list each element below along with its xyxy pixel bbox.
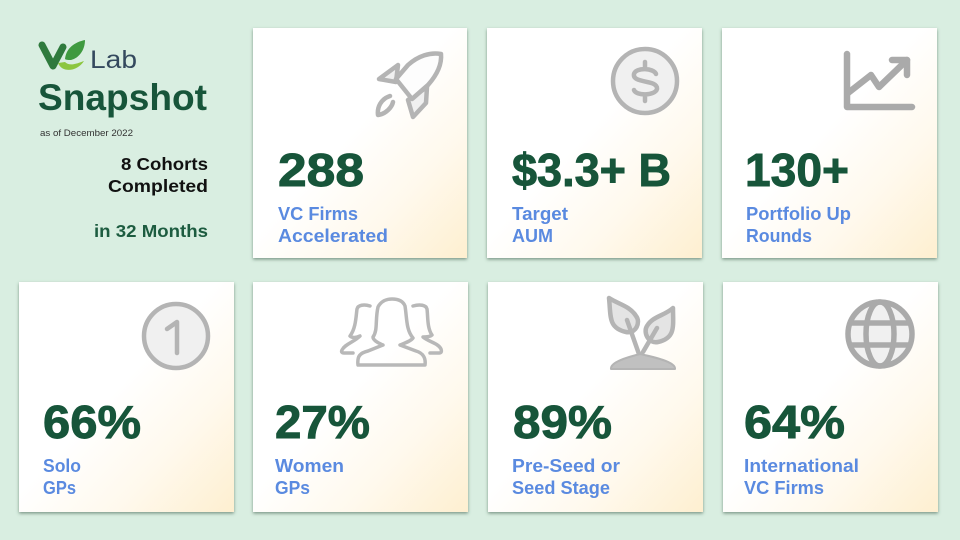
icon: dollar coin [613, 49, 677, 113]
label: Women [275, 455, 344, 476]
label: Pre-Seed or [512, 455, 620, 476]
panel: solo GPs [19, 282, 234, 512]
icon: seedling [609, 298, 675, 369]
value: 66% [43, 396, 141, 448]
icon: growth chart [847, 54, 912, 107]
icon: rocket [378, 53, 441, 117]
value: 64% [744, 396, 845, 448]
label [512, 203, 568, 246]
label: VC Firms [744, 477, 824, 498]
icon: number one [144, 304, 208, 368]
label: Target [512, 203, 568, 224]
label [278, 203, 388, 246]
heading: Snapshot: Snapshot [38, 77, 207, 118]
label [512, 455, 620, 498]
label: GPs [275, 477, 310, 498]
panel: portfolio up rounds [722, 28, 937, 258]
label [275, 455, 344, 498]
value: 288 [278, 144, 364, 196]
label [43, 455, 81, 498]
label: Seed Stage [512, 477, 610, 498]
label: GPs [43, 477, 76, 498]
months text: in 32 Months [94, 221, 208, 241]
icon: globe [848, 302, 912, 366]
panel: women GPs [253, 282, 468, 512]
label: Rounds [746, 225, 812, 246]
header block [38, 40, 208, 241]
value: 130+ [745, 144, 849, 196]
panel: pre-seed or seed stage [488, 282, 703, 512]
label [744, 455, 859, 498]
label: Solo [43, 455, 81, 476]
logo: VC Lab: Lab [90, 46, 137, 74]
panel: international VC firms [723, 282, 938, 512]
cohorts text [108, 154, 208, 196]
panel: VC firms accelerated [253, 28, 467, 258]
label: International [744, 455, 859, 476]
label [746, 203, 851, 246]
label: Accelerated [278, 225, 388, 246]
cohorts text: Completed [108, 176, 208, 196]
logo: VC Lab [42, 40, 137, 74]
value: 27% [275, 396, 370, 448]
cohorts text: 8 Cohorts [121, 154, 208, 174]
panel: target AUM [487, 28, 702, 258]
label: AUM [512, 225, 553, 246]
label: Portfolio Up [746, 203, 851, 224]
date note: as of December 2022 [40, 128, 133, 139]
label: VC Firms [278, 203, 358, 224]
icon: women group [342, 299, 441, 365]
value: 89% [513, 396, 612, 448]
value: $3.3+ B [512, 144, 671, 196]
